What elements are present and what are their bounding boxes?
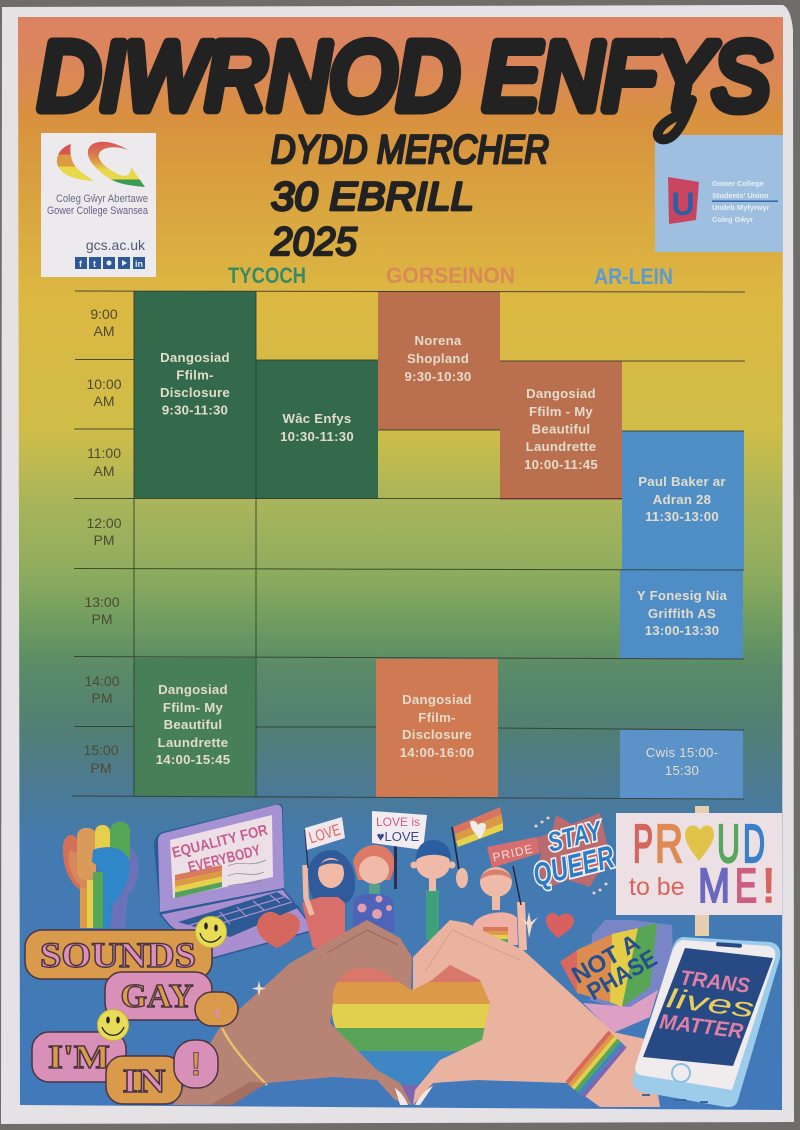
sticker: Sounds: SOUNDS — [40, 935, 196, 975]
logo: students' union: U — [671, 186, 695, 222]
time labels: 14:00 — [84, 673, 120, 689]
sticker: Gay: GAY — [120, 978, 194, 1015]
event: Dangosiad Ffilm Disclosure, Tycoch: Disclosure — [160, 385, 230, 400]
illustration: laptop: EQUALITY FOR — [170, 821, 270, 862]
time labels: PM — [92, 611, 112, 627]
event: Dangosiad Ffilm My Beautiful Laundrette, Gorseinon — [500, 361, 622, 500]
event: Dangosiad Ffilm Disclosure, Gorseinon: Ffilm- — [418, 710, 456, 725]
sticker: comma: , — [213, 988, 221, 1021]
time labels — [83, 306, 122, 776]
person with love is love sign: LOVE is — [376, 815, 420, 829]
sticker: In — [106, 1056, 182, 1104]
sticker: Gay — [105, 972, 212, 1020]
illustration: phone with Trans lives matter: lives — [665, 983, 756, 1024]
illustration: laptop — [154, 804, 315, 958]
event: Dangosiad Ffilm My Beautiful Laundrette, Gorseinon: Beautiful — [532, 422, 590, 436]
illustration: Not a phase sticker — [560, 920, 674, 1012]
event: Dangosiad Ffilm Disclosure, Gorseinon: 14:00-16:00 — [400, 745, 474, 760]
event: Dangosiad Ffilm My Beautiful Laundrette, Tycoch: Dangosiad — [158, 682, 228, 697]
illustration: Not a phase sticker: NOT A — [567, 929, 645, 990]
logo: students' union: Gower College — [712, 179, 764, 188]
illustration: Proud to be me sign: P — [633, 814, 653, 874]
sticker: exclamation mark — [174, 1040, 218, 1088]
illustration: Stay Queer sticker: STAY — [545, 815, 607, 858]
event: Norena Shopland — [378, 291, 500, 430]
event: Dangosiad Ffilm My Beautiful Laundrette, Gorseinon: Laundrette — [526, 439, 596, 454]
person with love sign — [302, 817, 355, 948]
event: Norena Shopland: 9:30-10:30 — [404, 369, 472, 384]
illustration: Proud to be me sign: M — [698, 860, 730, 913]
illustration: Stay Queer sticker — [523, 813, 618, 894]
illustration: rainbow fist — [63, 822, 139, 928]
person with love is love sign — [353, 811, 427, 932]
logo name: Gower College Swansea — [47, 205, 148, 217]
event: Y Fonesig Nia Griffith: 13:00-13:30 — [645, 623, 719, 638]
time labels: 12:00 — [86, 515, 122, 531]
time labels: AM — [94, 463, 114, 479]
event: Dangosiad Ffilm My Beautiful Laundrette, Tycoch: 14:00-15:45 — [156, 752, 230, 767]
time labels: PM — [90, 760, 112, 776]
illustration: phone with Trans lives matter: TRANS — [679, 966, 751, 998]
date heading: 2025 — [270, 220, 358, 264]
event: Dangosiad Ffilm My Beautiful Laundrette, Tycoch — [134, 658, 255, 796]
rainbow wristband — [567, 1032, 625, 1097]
illustration: Proud to be me sign — [616, 806, 782, 936]
event: Wâc Enfys: 10:30-11:30 — [280, 429, 354, 444]
time labels: PM — [92, 690, 112, 706]
table grid lines — [72, 291, 745, 799]
event: Dangosiad Ffilm Disclosure, Tycoch — [134, 291, 256, 498]
event: Paul Baker — [622, 431, 744, 570]
illustration: right hand — [395, 920, 660, 1107]
sticker: In: IN — [122, 1063, 166, 1100]
time labels: AM — [94, 393, 114, 409]
illustration: Proud to be me sign: E — [735, 860, 757, 913]
event: Cwis: 15:30 — [665, 763, 699, 778]
event: Wâc Enfys: Wâc Enfys — [283, 411, 351, 426]
illustration: Proud to be me sign: U — [717, 814, 740, 874]
event: Dangosiad Ffilm Disclosure, Tycoch: Dangosiad — [160, 350, 230, 365]
time labels: 10:00 — [86, 376, 122, 392]
event: Cwis — [620, 730, 743, 799]
sticker: I'm — [32, 1032, 126, 1082]
event: Dangosiad Ffilm Disclosure, Tycoch: Ffilm- — [176, 368, 214, 382]
illustration: left hand — [173, 920, 412, 1105]
event: Norena Shopland: Norena — [415, 333, 462, 348]
logo name: Coleg Gŵyr Abertawe — [56, 193, 148, 205]
illustration: Proud to be me sign: ! — [762, 860, 775, 913]
date heading: DYDD MERCHER — [271, 128, 549, 172]
event: Dangosiad Ffilm Disclosure, Tycoch: 9:30-11:30 — [162, 402, 228, 418]
illustration: Proud to be me sign: R — [655, 814, 683, 874]
person with love is love sign: ♥LOVE — [377, 829, 420, 844]
logo swoosh left — [57, 144, 94, 181]
logo: Gower College Swansea — [41, 133, 156, 277]
date heading — [270, 128, 549, 264]
logo: students' union: Students' Union — [712, 191, 769, 200]
sticker: comma — [195, 988, 238, 1026]
logo: students' union: Undeb Myfyrwyr — [712, 203, 770, 212]
column heading: Gorseinon: GORSEINON — [386, 263, 515, 288]
event: Dangosiad Ffilm My Beautiful Laundrette, Gorseinon: 10:00-11:45 — [524, 457, 598, 472]
time labels: 15:00 — [83, 742, 119, 758]
sticker: exclamation mark: ! — [191, 1046, 201, 1082]
logo social icons — [75, 257, 145, 269]
timetable — [72, 291, 745, 799]
logo: students' union — [655, 135, 783, 252]
man with flag — [410, 807, 503, 940]
logo web address: gcs.ac.uk — [86, 237, 146, 253]
sticker: I'm: I'M — [48, 1039, 110, 1076]
event: Paul Baker: 11:30-13:00 — [645, 509, 719, 524]
event: Paul Baker: Adran 28 — [653, 492, 711, 507]
person with love sign: LOVE — [307, 822, 343, 847]
illustration: heart on laptop — [257, 912, 300, 948]
logo name — [47, 193, 148, 217]
illustration: group of people with signs — [302, 807, 540, 950]
event: Dangosiad Ffilm Disclosure, Gorseinon: Dangosiad — [402, 692, 472, 707]
event: Y Fonesig Nia Griffith — [620, 570, 743, 659]
icon: smiley top — [196, 916, 226, 948]
illustration: Not a phase sticker: PHASE — [583, 945, 662, 1006]
event: Y Fonesig Nia Griffith: Griffith AS — [648, 606, 716, 621]
time labels: 11:00 — [87, 445, 121, 461]
event: Wâc Enfys — [256, 360, 378, 499]
illustration: laptop: EVERYBODY — [186, 842, 262, 876]
column heading: Ar-lein: AR-LEIN — [594, 264, 673, 289]
event: Dangosiad Ffilm Disclosure, Gorseinon — [376, 659, 498, 797]
sticker: Sounds — [25, 930, 212, 979]
date heading: 30 EBRILL — [271, 175, 474, 219]
person with pride sign — [473, 837, 540, 950]
event: Dangosiad Ffilm My Beautiful Laundrette, Tycoch: Beautiful — [164, 717, 222, 732]
icon: smiley bottom — [98, 1010, 128, 1040]
illustration: phone with Trans lives matter: MATTER — [658, 1010, 745, 1043]
event: Dangosiad Ffilm My Beautiful Laundrette, Tycoch: Laundrette — [158, 735, 228, 750]
logo swoosh right — [88, 142, 145, 187]
column heading: Tycoch: TYCOCH — [228, 263, 306, 288]
logo social icons: f — [79, 259, 83, 269]
time labels: 9:00 — [90, 306, 118, 322]
event: Dangosiad Ffilm My Beautiful Laundrette, Gorseinon: Dangosiad — [526, 386, 596, 401]
illustration: sparkles — [252, 912, 538, 996]
event: Dangosiad Ffilm My Beautiful Laundrette, Tycoch: Ffilm- My — [163, 700, 223, 715]
event: Norena Shopland: Shopland — [407, 351, 469, 366]
event: Dangosiad Ffilm My Beautiful Laundrette, Gorseinon: Ffilm - My — [529, 404, 593, 419]
event: Paul Baker: Paul Baker ar — [638, 474, 726, 489]
event: Y Fonesig Nia Griffith: Y Fonesig Nia — [637, 588, 728, 603]
time labels: AM — [94, 323, 114, 339]
logo social icons: in — [135, 259, 143, 269]
illustration: rainbow heart — [332, 965, 490, 1104]
time labels: 13:00 — [84, 594, 120, 610]
illustration: Proud to be me sign: to be — [629, 873, 685, 901]
event: Dangosiad Ffilm Disclosure, Gorseinon: Disclosure — [402, 727, 472, 742]
logo social icons: t — [93, 259, 96, 269]
illustration: Stay Queer sticker: QUEER — [529, 838, 618, 893]
illustration: phone with Trans lives matter — [632, 937, 780, 1107]
person with pride sign: PRIDE — [491, 841, 535, 865]
logo: students' union: Coleg Gŵyr — [712, 215, 753, 224]
time labels: PM — [94, 532, 114, 548]
illustration: small heart — [546, 913, 574, 938]
event: Cwis: Cwis 15:00- — [646, 745, 718, 760]
illustration: Proud to be me sign: D — [743, 814, 765, 874]
